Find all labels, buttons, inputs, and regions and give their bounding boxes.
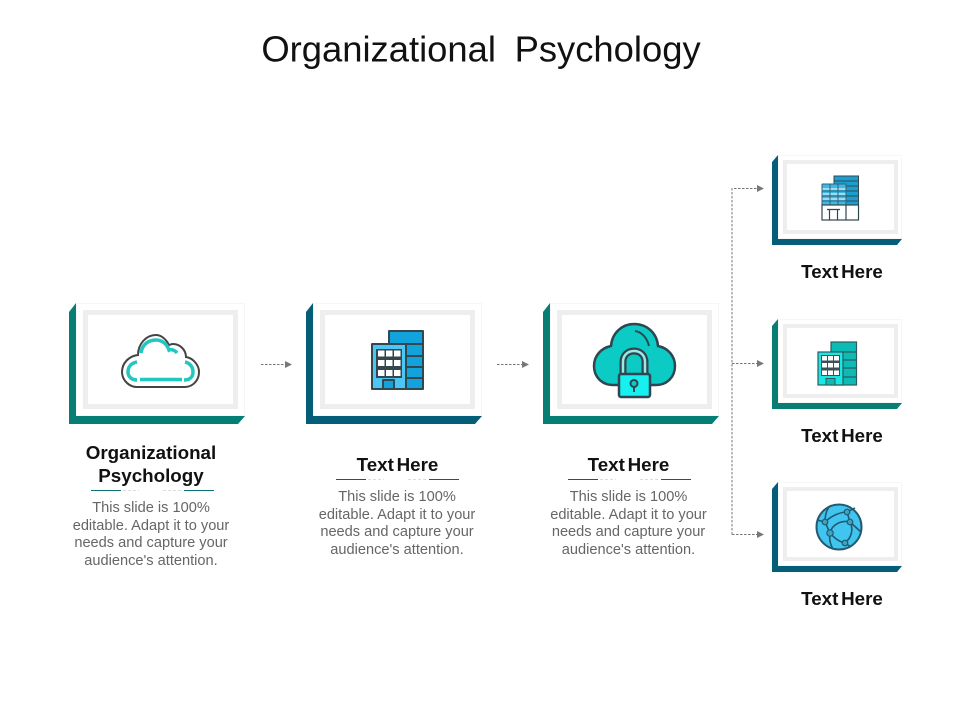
text block: description 3: needs and capture your bbox=[552, 524, 705, 540]
divider bbox=[568, 478, 691, 480]
divider bbox=[336, 478, 459, 480]
title: Organizational Psychology bbox=[261, 28, 701, 70]
panel: middle right card bbox=[772, 319, 902, 409]
text block: description 2: This slide is 100% bbox=[338, 489, 456, 505]
arrow 1 bbox=[261, 361, 292, 368]
panel: building card bbox=[306, 303, 482, 424]
text block: description 1: audience's attention. bbox=[84, 553, 218, 569]
icon: teal office building bbox=[818, 342, 856, 385]
label: text here bottom: Text Here bbox=[801, 588, 883, 609]
text block: description 2: audience's attention. bbox=[330, 542, 464, 558]
panel: organizational psychology card bbox=[69, 303, 245, 424]
heading: text here 2: Text Here bbox=[357, 454, 438, 475]
text block: description 1: This slide is 100% bbox=[92, 500, 210, 516]
text block: description 2: needs and capture your bbox=[320, 524, 474, 540]
text block: description 3: This slide is 100% bbox=[570, 489, 687, 505]
text block: description 1: editable. Adapt it to your bbox=[73, 518, 229, 534]
heading: organizational psychology: Psychology bbox=[98, 465, 204, 486]
text block: description 1 bbox=[73, 500, 229, 569]
icon: network globe bbox=[816, 504, 862, 550]
arrow connector: branching arrows bbox=[732, 185, 764, 538]
label: text here middle: Text Here bbox=[801, 425, 883, 446]
icon: cloud outline bbox=[122, 335, 199, 387]
heading: text here 3: Text Here bbox=[588, 454, 669, 475]
panel: bottom right card bbox=[772, 482, 902, 572]
label: text here top: Text Here bbox=[801, 261, 883, 282]
text block: description 3: audience's attention. bbox=[562, 542, 695, 558]
text block: description 1: needs and capture your bbox=[74, 535, 228, 551]
icon: office building bbox=[372, 331, 423, 389]
icon: cloud with padlock bbox=[594, 324, 675, 397]
heading: organizational psychology: Organizational bbox=[86, 442, 216, 463]
icon: tall building bbox=[822, 176, 858, 220]
text block: description 3: editable. Adapt it to your bbox=[550, 507, 707, 523]
heading: organizational psychology bbox=[86, 442, 216, 486]
divider bbox=[91, 490, 214, 492]
text block: description 3 bbox=[550, 489, 707, 558]
text block: description 2 bbox=[319, 489, 475, 558]
text block: description 2: editable. Adapt it to your bbox=[319, 507, 475, 523]
arrow 2 bbox=[497, 361, 529, 368]
panel: cloud lock card bbox=[543, 303, 719, 424]
panel: top right card bbox=[772, 155, 902, 245]
